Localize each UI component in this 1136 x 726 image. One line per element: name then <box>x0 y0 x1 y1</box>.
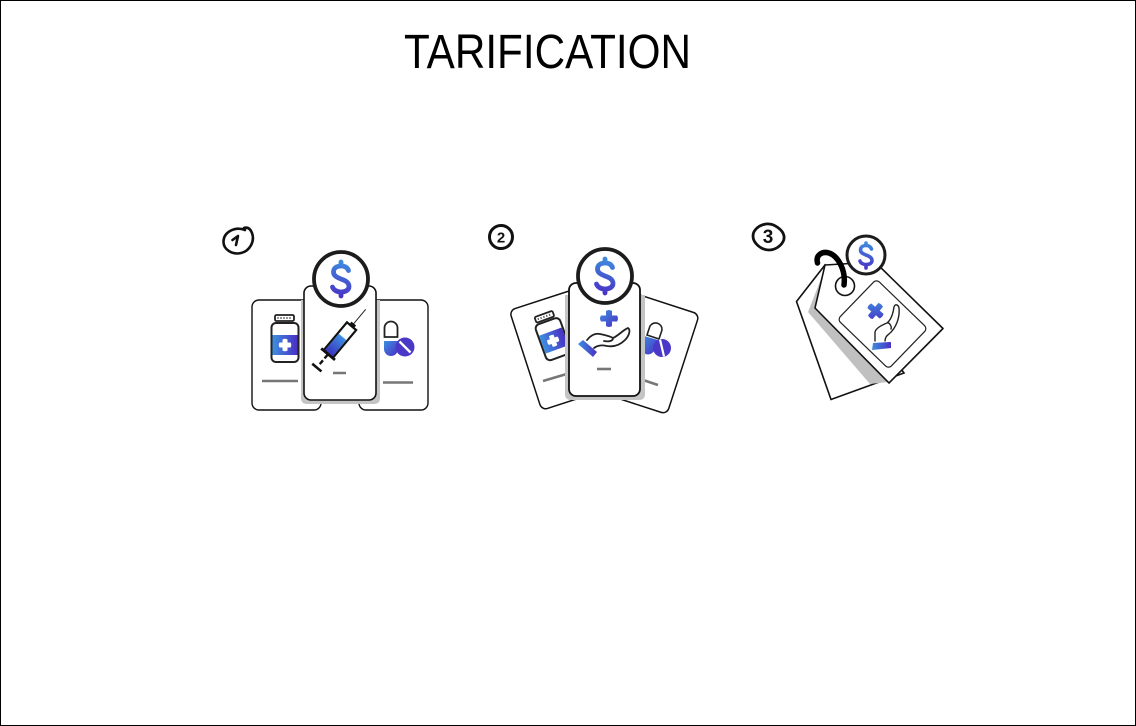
card shadow <box>565 295 645 400</box>
coin badge <box>578 249 632 303</box>
dash line <box>597 368 611 370</box>
step 1 number <box>223 228 253 253</box>
icon: pills <box>384 322 414 356</box>
step 2 number: 2 <box>497 230 505 246</box>
card shadow <box>301 300 380 404</box>
icon: bottle <box>272 315 298 362</box>
left tilted card <box>509 289 608 410</box>
icon: tilted pills <box>641 323 671 357</box>
icon: syringe <box>310 304 373 373</box>
panel 3: price tags <box>796 236 943 400</box>
right tilted card <box>600 293 699 414</box>
coin badge <box>314 252 368 306</box>
panel 2: fanned cards <box>509 249 699 414</box>
step 3 number: 3 <box>763 227 773 248</box>
coin badge <box>847 236 885 274</box>
icon: hand with cross <box>863 299 899 350</box>
tilted dash lines <box>543 373 658 385</box>
right card <box>359 300 428 410</box>
left card <box>252 300 321 410</box>
tag shadow <box>808 266 888 384</box>
inner label <box>838 279 927 369</box>
tag hole and string <box>817 252 854 296</box>
center card <box>569 283 640 396</box>
front tag <box>815 262 943 383</box>
center card <box>304 286 376 400</box>
icon: tilted bottle <box>532 309 572 361</box>
title: TARIFICATION <box>404 26 691 79</box>
dash lines <box>262 373 413 382</box>
step 2 number <box>490 226 512 248</box>
panel 1: three medicine cards <box>252 252 428 410</box>
back tag <box>796 265 904 400</box>
step 3 number <box>753 224 784 250</box>
icon: hand with cross <box>578 310 629 357</box>
